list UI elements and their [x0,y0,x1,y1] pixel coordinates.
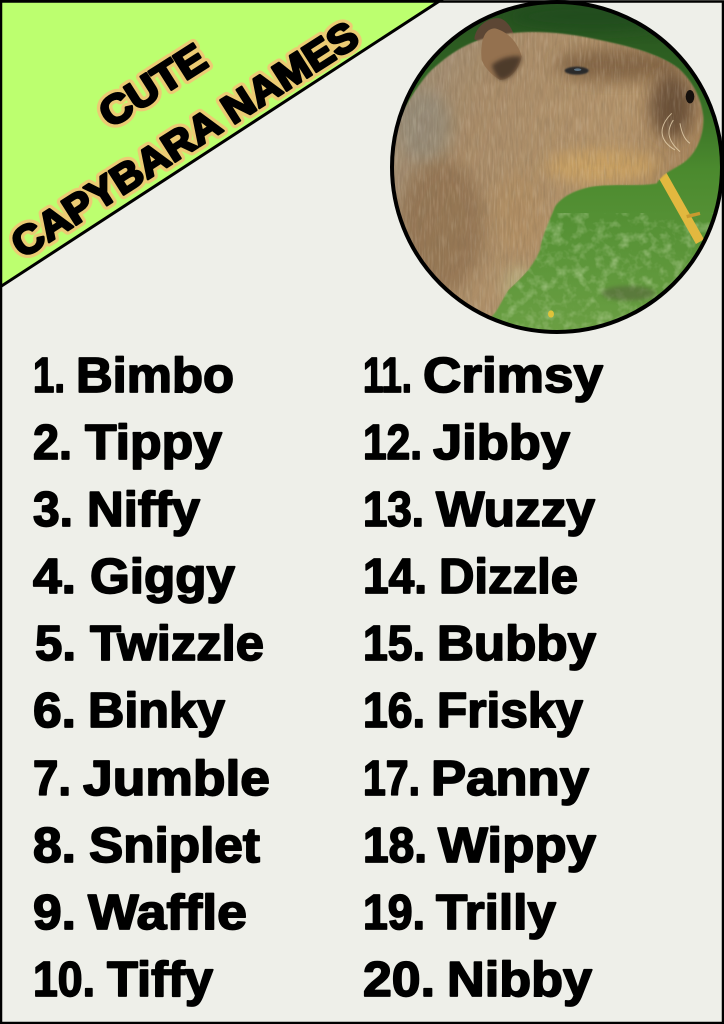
name 6: Binky [88,684,225,738]
name 6: 6. [33,684,76,738]
name 12 [363,416,570,470]
name 8: 8. [33,819,76,873]
name 10 [33,953,213,1007]
name 7: 7. [33,752,71,806]
name 1: Bimbo [76,349,234,403]
name 9: Waffle [88,886,247,940]
name 2: 2. [33,416,72,470]
grass background [404,4,720,330]
name 19: 19. [363,886,425,940]
circular capybara photo illustration [382,0,724,340]
title line: CAPYBARA NAMES: CAPYBARA NAMES [4,13,366,267]
name 14: Dizzle [439,550,578,604]
title line: CUTE: CUTE [91,36,215,136]
whiskers [662,113,690,152]
title: Cute Capybara Names [4,13,366,267]
name 14: 14. [363,550,427,604]
name 9 [33,886,247,940]
title line: CAPYBARA NAMES: CAPYBARA NAMES [4,13,366,267]
name 13: 13. [363,483,424,537]
name 3: Niffy [87,483,200,537]
name 3: 3. [33,483,73,537]
eye [565,67,589,75]
name 17 [363,752,589,806]
name 11: 11. [363,349,412,403]
capybara body and head [382,32,703,333]
name 16: 16. [363,684,425,738]
name 6 [33,684,225,738]
name 4: Giggy [90,550,235,604]
name 17: 17. [363,752,420,806]
name 13 [363,483,595,537]
name 19 [363,886,556,940]
name 1: 1. [33,349,65,403]
name 17: Panny [431,752,589,806]
fur shading [396,28,702,315]
name 7: Jumble [83,752,270,806]
name 18: 18. [363,819,427,873]
name 13: Wuzzy [436,483,595,537]
name 2 [33,416,222,470]
name 9: 9. [33,886,76,940]
right column of names, 11 to 20 [363,349,603,1007]
name 18: Wippy [438,819,596,873]
name 15: Bubby [437,617,596,671]
name 16 [363,684,583,738]
name 5: Twizzle [90,617,264,671]
name 3 [33,483,200,537]
name 14 [363,550,578,604]
name 10: Tiffy [107,953,213,1007]
ear [481,28,522,80]
header banner: green corner triangle [0,0,441,287]
name 8: Sniplet [89,819,260,873]
bamboo stick [662,175,700,242]
name 18 [363,819,596,873]
name 5: 5. [35,617,76,671]
name 12: Jibby [433,416,570,470]
name 11: Crimsy [423,349,603,403]
left column of names, 1 to 10 [33,349,270,1007]
name 15 [363,617,596,671]
name 20 [363,953,592,1007]
name 2: Tippy [85,416,222,470]
name 19: Trilly [436,886,556,940]
name 20: 20. [363,953,435,1007]
name 4: 4. [33,550,76,604]
nose [686,90,694,103]
name 12: 12. [363,416,422,470]
back ear [474,18,513,43]
title line: CUTE: CUTE [91,36,215,136]
name 15: 15. [363,617,425,671]
name 10: 10. [33,953,95,1007]
name 4 [33,550,235,604]
name 16: Frisky [437,684,583,738]
photo ring [392,2,722,332]
name 11 [363,349,603,403]
name 20: Nibby [447,953,592,1007]
